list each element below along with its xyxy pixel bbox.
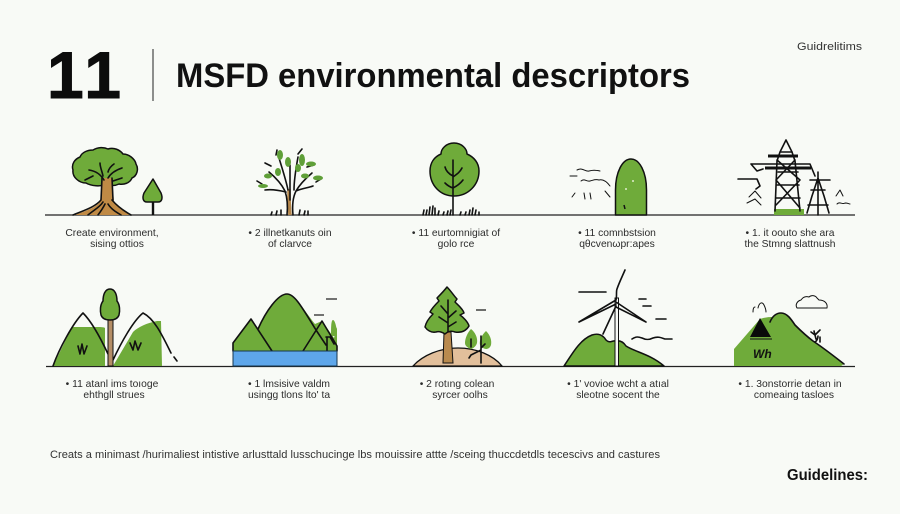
- icon: two mountains with tree: [53, 289, 177, 366]
- label 4: [578, 228, 656, 250]
- label 9: [567, 379, 669, 401]
- icon: large tree with roots and small tree: [72, 148, 162, 215]
- icon: branching tree with leaves: [257, 149, 323, 215]
- label 5: the Stmng slattnush: [744, 239, 836, 250]
- icon: volcano hill with cloud: [734, 296, 844, 366]
- label 9: • 1' vovioe wcht a atıal: [567, 379, 669, 390]
- title divider: [152, 49, 154, 101]
- label 2: • 2 illnetkanuts oin: [248, 228, 332, 239]
- row 2 baseline: [46, 366, 855, 368]
- label 1: sising ottios: [90, 239, 144, 250]
- label 4: qθcvenωpr:apes: [579, 239, 655, 250]
- label 7: usingg tlons lto' ta: [248, 390, 330, 401]
- icon: transmission towers: [738, 140, 850, 215]
- icon: tree on a mound: [413, 287, 502, 366]
- icon: wind turbine and green hill: [564, 270, 672, 366]
- label 3: [412, 228, 500, 250]
- icon: volcano hill with cloud: Wh: [753, 347, 772, 361]
- number: 11: 11: [47, 38, 121, 112]
- label 10: • 1. 3onstorrie detan in: [738, 379, 842, 390]
- label 6: • 11 atanl ims toıoge: [66, 379, 159, 390]
- label 4: • 11 comnbstsion: [578, 228, 656, 239]
- icon: round tree with grass: [423, 143, 479, 215]
- label 3: golo rce: [438, 239, 475, 250]
- label 7: • 1 lmsisive valdm: [248, 379, 330, 390]
- icon: mountains over lake: [233, 294, 337, 366]
- label 8: [420, 379, 495, 401]
- label 10: [738, 379, 842, 401]
- label 2: of clarvce: [268, 239, 312, 250]
- icon: green dome with wind lines: [570, 159, 646, 215]
- label 7: [248, 379, 330, 401]
- label 10: comeaing tasloes: [754, 390, 834, 401]
- guidelines label: Guidelines:: [787, 467, 868, 484]
- label 1: Create environment,: [65, 228, 159, 239]
- top-right note: Guidrelitims: [797, 41, 863, 53]
- label 6: [66, 379, 159, 401]
- label 6: ehthgll strues: [83, 390, 145, 401]
- footer text: Creats a minimast /hurimaliest intistive arlusttald lusschucinge lbs mouissire attte /sceing thuccdetdls tecescivs and castures: [50, 449, 660, 461]
- label 8: syrcer oolhs: [432, 390, 488, 401]
- label 5: [744, 228, 836, 250]
- label 9: sleotne socent the: [576, 390, 660, 401]
- label 8: • 2 rotıng colean: [420, 379, 495, 390]
- title: MSFD environmental descriptors: [176, 57, 690, 95]
- label 3: • 11 eurtomnigiat of: [412, 228, 500, 239]
- label 1: [65, 228, 159, 250]
- row 1 baseline: [45, 214, 855, 216]
- label 5: • 1. it oouto she ara: [746, 228, 835, 239]
- label 2: [248, 228, 332, 250]
